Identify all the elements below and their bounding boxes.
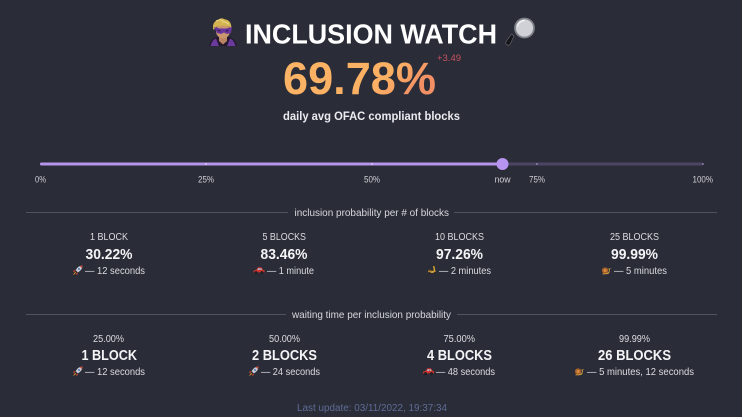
tick labels: 100% [692, 174, 713, 186]
stat: 25 blocks: 25 BLOCKS [610, 232, 659, 243]
tick labels: 0% [35, 174, 46, 186]
tick labels: 25% [198, 174, 214, 186]
track remainder [502, 162, 703, 166]
stat: 25 blocks: — 5 minutes [614, 265, 667, 277]
stat: 50.00% [249, 334, 320, 378]
tick labels: now [494, 174, 511, 186]
stat: 25.00%: — 12 seconds [85, 366, 145, 378]
stat: 5 blocks: — 1 minute [267, 265, 314, 277]
stat: 10 blocks: 97.26% [436, 247, 483, 263]
icon: snail [575, 368, 584, 375]
section heading: inclusion probability: inclusion probability per # of blocks [294, 207, 449, 219]
stat: 99.99%: 99.99% [619, 334, 650, 345]
stat: 25 blocks: 99.99% [611, 247, 658, 263]
tick labels: 50% [364, 174, 380, 186]
title [209, 18, 534, 50]
heading text: INCLUSION WATCH [245, 18, 497, 50]
stat: 1 block: 30.22% [86, 247, 133, 263]
stat: 75.00%: 75.00% [444, 334, 475, 345]
section heading: waiting time: waiting time per inclusion probability [291, 309, 452, 321]
stat: 25 blocks [602, 232, 667, 277]
icon: rocket [73, 265, 83, 275]
icon: snail [602, 267, 611, 274]
icon: rocket [73, 366, 83, 376]
stat: 75.00% [423, 334, 495, 378]
tick labels: 75% [529, 174, 545, 186]
stat: 10 blocks [428, 232, 491, 277]
thumb [496, 158, 508, 170]
icon: magnifying glass [506, 18, 534, 45]
delta: +3.49 [437, 53, 461, 63]
icon: rocket [249, 366, 259, 376]
icon: masked superhero [209, 18, 237, 46]
big percentage: 69.78% [283, 53, 436, 104]
stat: 5 blocks [254, 232, 314, 277]
stat: 99.99%: 26 BLOCKS [598, 348, 671, 364]
headline metric: 69.78% [283, 53, 461, 104]
stat: 99.99%: — 5 minutes, 12 seconds [587, 366, 694, 378]
icon: car [254, 267, 265, 274]
tick labels [35, 174, 713, 186]
icon: car [423, 368, 434, 375]
stat: 10 blocks: 10 BLOCKS [435, 232, 484, 243]
stat: 50.00%: 2 BLOCKS [252, 348, 317, 364]
subtitle: daily avg OFAC compliant blocks [283, 109, 460, 123]
stat: 1 block: 1 BLOCK [90, 232, 128, 243]
stat: 10 blocks: — 2 minutes [439, 265, 491, 277]
progress slider [35, 158, 713, 186]
stat: 1 block [73, 232, 145, 277]
stat: 75.00%: — 48 seconds [436, 366, 495, 378]
filled track [40, 162, 502, 166]
stat: 5 blocks: 83.46% [260, 247, 308, 263]
stat: 99.99% [575, 334, 694, 378]
stat: 75.00%: 4 BLOCKS [427, 348, 492, 364]
stat: 50.00%: 50.00% [269, 334, 300, 345]
stat: 25.00%: 25.00% [93, 334, 124, 345]
stat: 50.00%: — 24 seconds [261, 366, 320, 378]
footer: last update: Last update: 03/11/2022, 19:37:34 [297, 403, 447, 414]
stat: 25.00% [73, 334, 145, 378]
stat: 1 block: — 12 seconds [85, 265, 145, 277]
stat: 25.00%: 1 BLOCK [82, 348, 137, 364]
stat: 5 blocks: 5 BLOCKS [262, 232, 306, 243]
icon: scooter [428, 266, 436, 274]
